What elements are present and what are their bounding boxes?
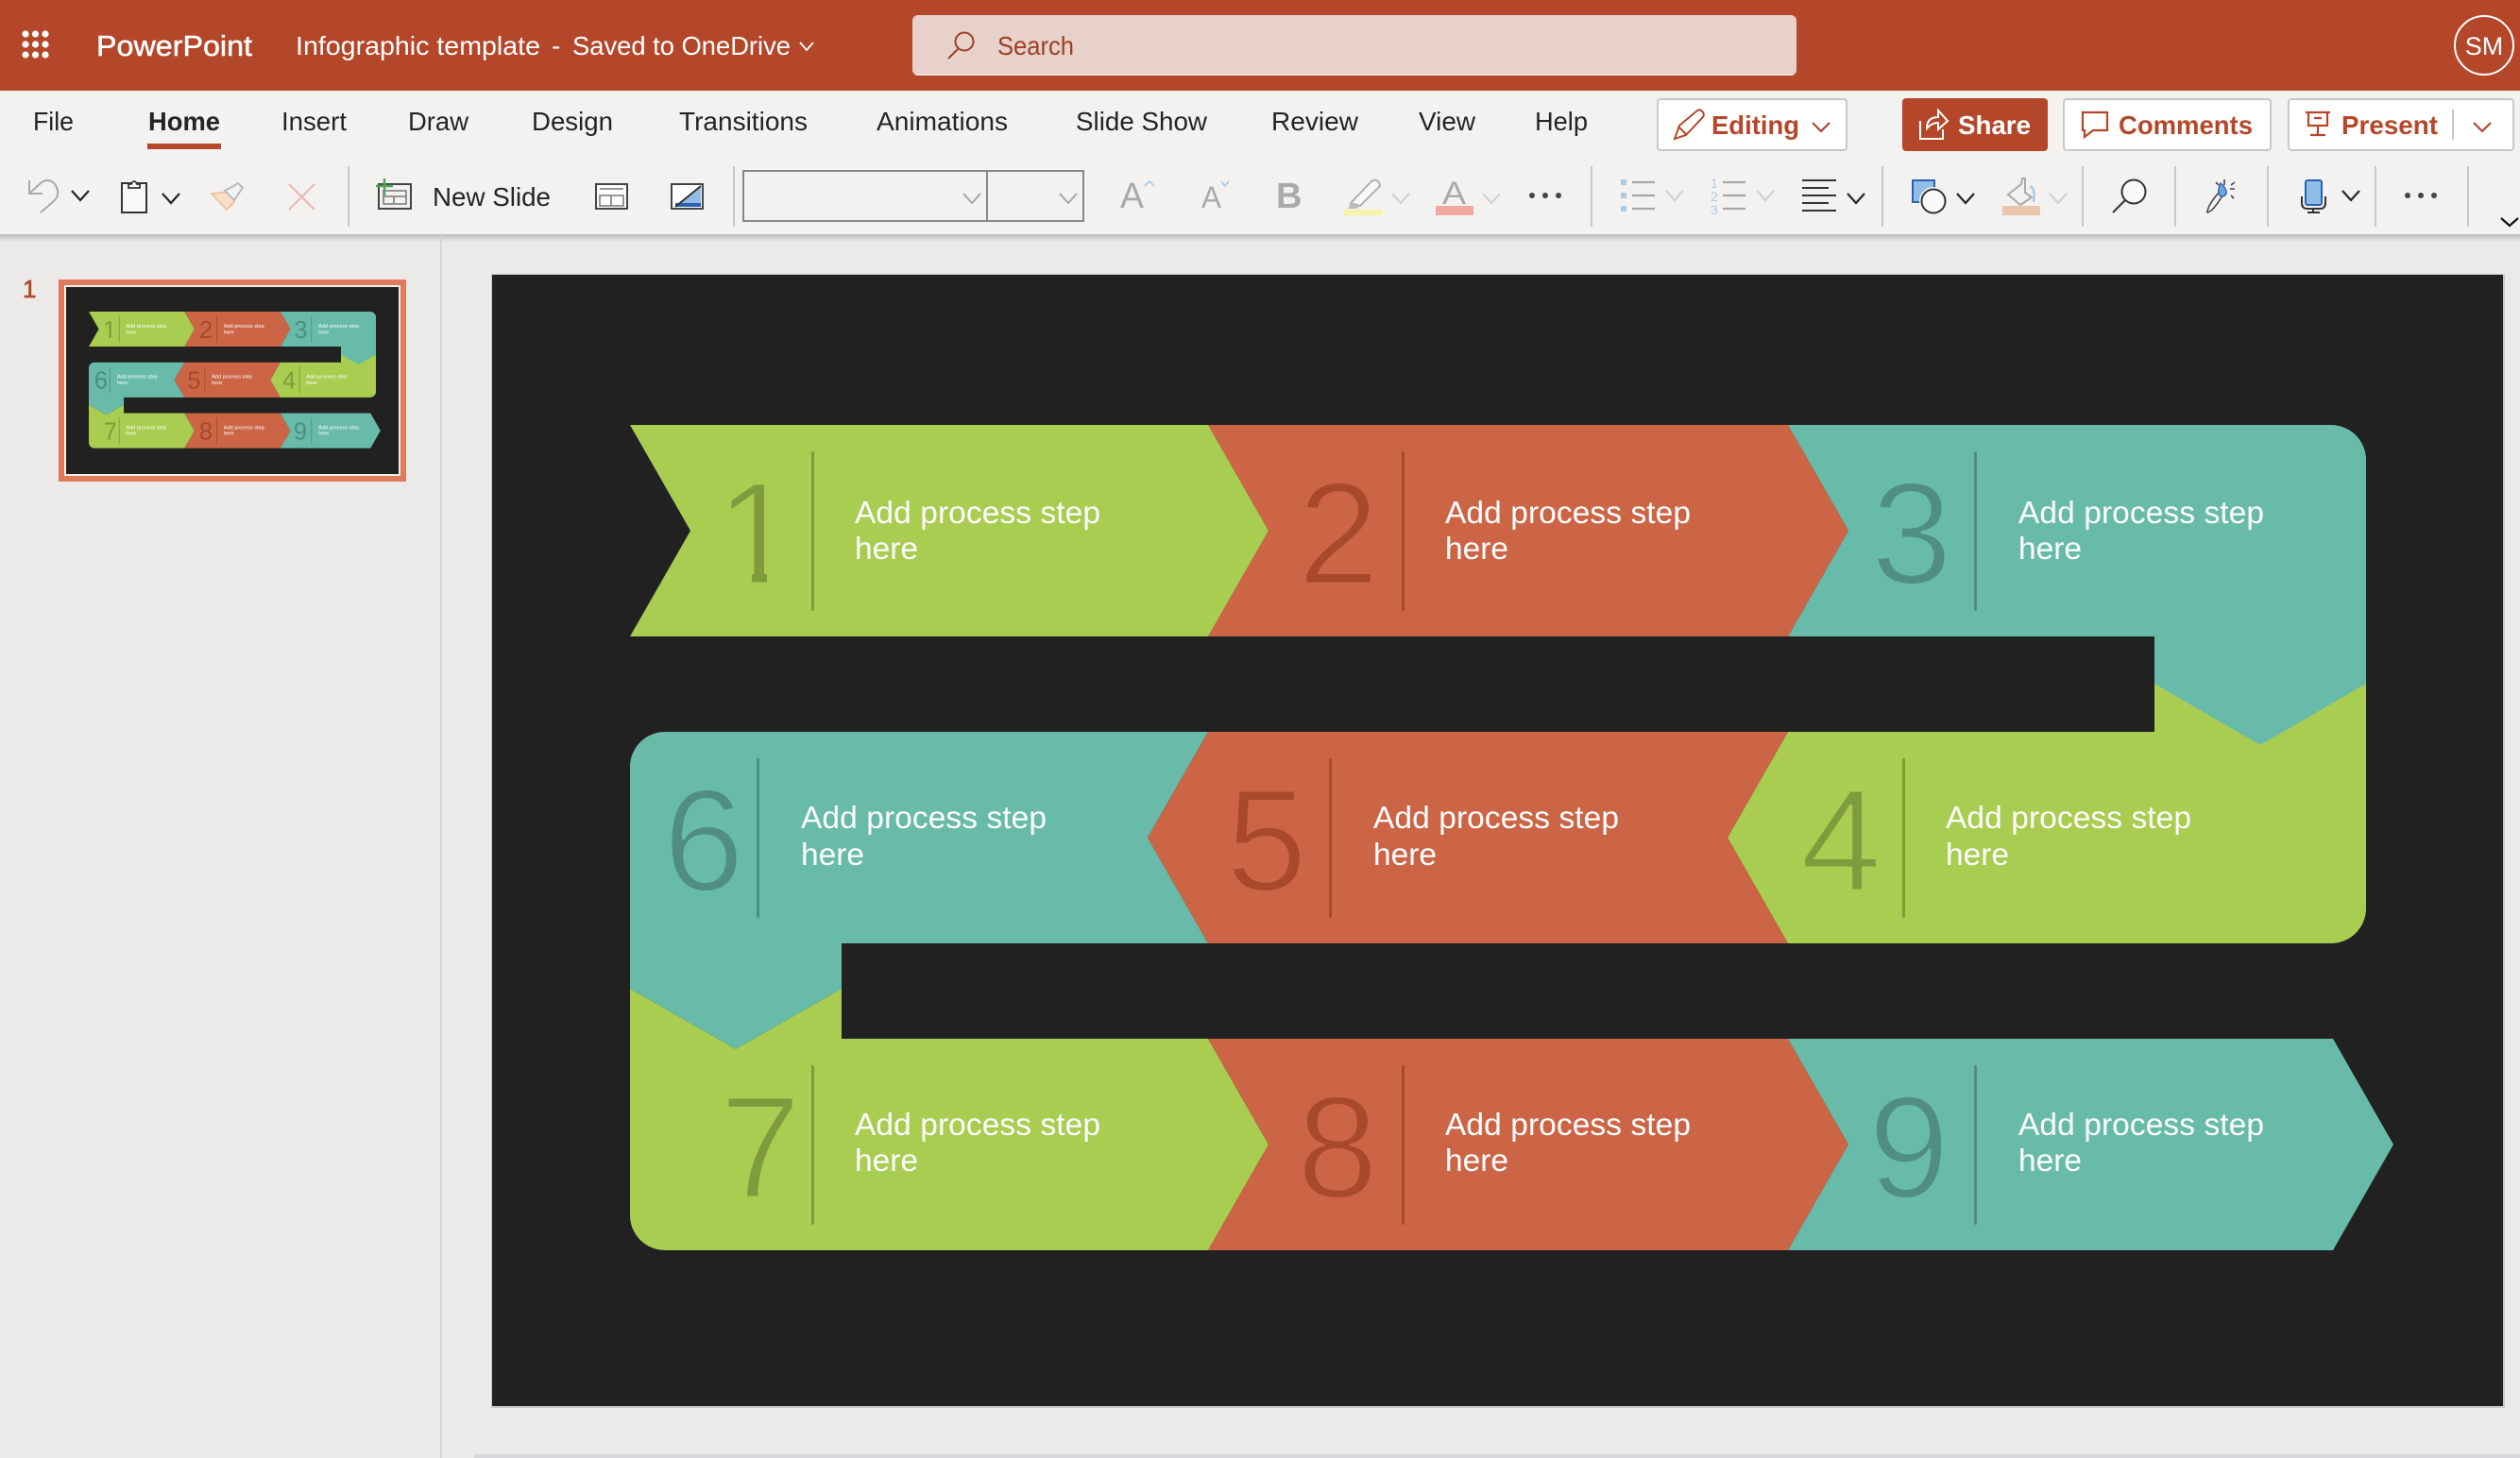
step 7: Add process step — [855, 1108, 1100, 1143]
toolbar: align — [1802, 180, 1864, 211]
tab row: Design — [532, 107, 613, 136]
step 6: Add process step — [801, 801, 1047, 836]
step 9 — [1788, 1039, 2393, 1250]
slide thumbnail: here — [117, 381, 128, 386]
toolbar: font colour: A — [1442, 176, 1466, 212]
button: Share — [1902, 98, 2048, 151]
step 8: Add process step — [1445, 1108, 1691, 1143]
step 8 — [1208, 1039, 1848, 1250]
tab row: Transitions — [679, 107, 808, 136]
step 1: Add process step — [855, 496, 1100, 531]
button: Comments — [2064, 99, 2271, 150]
slide thumbnail: Add process step — [306, 375, 347, 381]
document title: - — [552, 31, 560, 60]
slide thumbnail: Add process step — [224, 425, 264, 431]
slide thumbnail — [61, 282, 403, 479]
toolbar: designer — [2207, 179, 2235, 212]
slide thumbnail: 9 — [294, 418, 307, 445]
toolbar: separators — [348, 166, 2469, 227]
toolbar: collapse ribbon — [2501, 218, 2518, 226]
tab row: Insert — [281, 107, 347, 136]
document title: Infographic template — [296, 31, 540, 60]
slide thumbnail: here — [318, 432, 329, 437]
step 2: Add process step — [1445, 496, 1691, 531]
slide thumbnail: here — [318, 330, 329, 335]
button: Editing — [1658, 99, 1847, 150]
slide thumbnail: here — [306, 381, 316, 386]
step 7: here — [855, 1144, 918, 1178]
step 5 — [1148, 732, 1788, 943]
slide thumbnail: Add process step — [318, 324, 359, 330]
search box: Search — [997, 31, 1074, 60]
tab row: Slide Show — [1076, 107, 1208, 136]
tab row: File — [33, 107, 74, 136]
slide thumbnail: Add process step — [126, 425, 166, 431]
document title — [296, 31, 791, 60]
tab row: Help — [1535, 107, 1588, 136]
slide thumbnail: here — [212, 381, 222, 386]
step 6: 6 — [663, 759, 744, 922]
toolbar: font name and size boxes — [743, 171, 1083, 221]
step 9: Add process step — [2018, 1108, 2264, 1143]
slide thumbnail: 4 — [282, 368, 296, 395]
tab row: Animations — [877, 107, 1008, 136]
title bar — [0, 0, 2520, 91]
tab row — [33, 107, 1588, 149]
icon: title chevron — [800, 42, 813, 50]
slide thumbnail: Add process step — [318, 425, 359, 431]
button: Comments: Comments — [2119, 110, 2253, 140]
step 7: 7 — [720, 1066, 801, 1229]
toolbar: format painter — [212, 183, 243, 210]
step 1: here — [855, 532, 918, 567]
tab row: Draw — [408, 107, 469, 136]
button: Editing: Editing — [1711, 110, 1799, 140]
button: Share: Share — [1958, 110, 2031, 140]
account avatar: SM — [2465, 32, 2503, 60]
toolbar: numbering: 1 — [1711, 176, 1718, 191]
toolbar: shape fill — [2002, 178, 2067, 215]
step 4: here — [1946, 838, 2009, 873]
step 7 — [630, 989, 1269, 1250]
toolbar: more options — [2405, 193, 2437, 198]
toolbar: paste — [122, 181, 179, 212]
toolbar: new slide: New Slide — [433, 182, 551, 212]
toolbar: delete — [289, 184, 315, 210]
search box — [912, 15, 1796, 76]
toolbar: new slide — [376, 178, 551, 212]
toolbar: bold: B — [1276, 177, 1302, 216]
slide thumbnail: 7 — [104, 418, 117, 445]
ribbon — [0, 91, 2520, 242]
step 4 — [1728, 684, 2366, 943]
step 2: here — [1445, 532, 1508, 567]
slide thumbnail: Add process step — [126, 324, 166, 330]
step 6: here — [801, 838, 864, 873]
step 2: 2 — [1298, 452, 1379, 615]
slide thumbnail: here — [126, 432, 136, 437]
account avatar — [2455, 16, 2513, 75]
slide thumbnail: 2 — [199, 317, 213, 344]
toolbar: find — [2113, 179, 2146, 212]
app name: PowerPoint — [96, 29, 252, 62]
toolbar: bullets — [1621, 179, 1683, 212]
tab row: View — [1419, 107, 1476, 136]
bottom scroll strip — [474, 1454, 2520, 1458]
slide thumbnail: Add process step — [117, 375, 158, 381]
step 4: 4 — [1800, 759, 1881, 922]
tab row: Review — [1271, 107, 1359, 136]
slide thumbnail: 6 — [94, 368, 108, 395]
toolbar: font colour — [1436, 176, 1500, 215]
step 9: 9 — [1868, 1066, 1950, 1229]
step 3 — [1788, 425, 2366, 745]
slide thumbnail: 1 — [103, 317, 116, 344]
toolbar: numbering: 3 — [1711, 202, 1718, 217]
slide thumbnail: Add process step — [212, 375, 252, 381]
slide thumbnail: here — [224, 330, 234, 335]
slide thumbnail: here — [126, 330, 136, 335]
thumbnail pane — [23, 236, 442, 1458]
toolbar: shrink font: A — [1201, 180, 1222, 214]
toolbar: numbering — [1711, 176, 1774, 217]
step 3: 3 — [1871, 452, 1952, 615]
toolbar: more font options — [1529, 193, 1561, 198]
toolbar: grow font: A — [1120, 177, 1145, 216]
step 9: here — [2018, 1144, 2082, 1178]
step 8: 8 — [1297, 1066, 1378, 1229]
button: Present — [2289, 99, 2513, 150]
slide number: 1 — [23, 275, 36, 303]
step 4: Add process step — [1946, 801, 2191, 836]
step 5: Add process step — [1373, 801, 1619, 836]
main slide — [491, 274, 2505, 1408]
toolbar: dictate — [2302, 180, 2359, 212]
step 1 — [630, 425, 1269, 636]
slide thumbnail: Add process step — [224, 324, 264, 330]
step 5: 5 — [1226, 759, 1307, 922]
toolbar: layout — [596, 184, 627, 209]
toolbar: shapes — [1913, 180, 1974, 215]
step 1: 1 — [716, 452, 797, 615]
step 8: here — [1445, 1144, 1508, 1178]
slide thumbnail: 8 — [199, 418, 213, 445]
step 5: here — [1373, 838, 1437, 873]
slide thumbnail: 3 — [294, 317, 308, 344]
icon: app launcher waffle — [22, 30, 49, 59]
step 3: here — [2018, 532, 2082, 567]
toolbar: undo — [29, 180, 89, 212]
toolbar: highlight — [1344, 180, 1409, 215]
button: Present: Present — [2341, 110, 2438, 140]
toolbar: background — [672, 184, 703, 209]
slide thumbnail: here — [224, 432, 234, 437]
tab row: Home — [148, 107, 220, 136]
step 2 — [1208, 425, 1848, 636]
toolbar: numbering: 2 — [1711, 189, 1718, 204]
step 3: Add process step — [2018, 496, 2264, 531]
document title: Saved to OneDrive — [572, 31, 791, 60]
step 6 — [630, 732, 1208, 1049]
slide thumbnail: 5 — [187, 368, 201, 395]
